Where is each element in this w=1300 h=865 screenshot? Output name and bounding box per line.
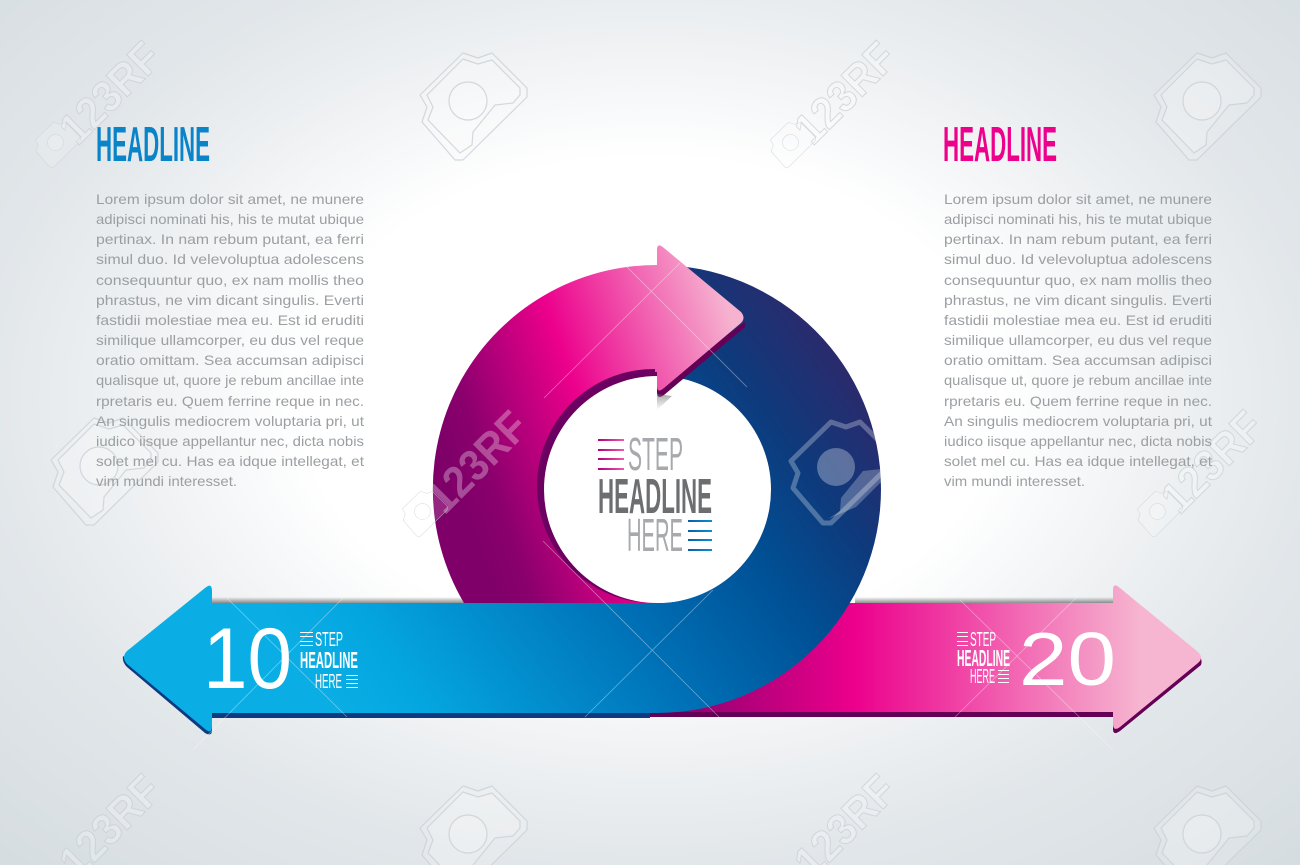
text block: right lorem ipsum: consequuntur quo, ex nam mollis theo <box>944 272 1212 288</box>
arrow: pink ring body <box>433 265 657 603</box>
watermark: stamp middle left <box>51 418 158 525</box>
text block: right lorem ipsum: rpretaris eu. Quem ferrine reque in nec. <box>944 393 1212 409</box>
text block: left lorem ipsum: oratio omittam. Sea accumsan adipisci <box>96 352 364 368</box>
text block: right lorem ipsum: solet mel cu. Has ea idque intellegat, et <box>944 453 1212 469</box>
text block: right lorem ipsum: qualisque ut, quore je rebum ancillae inte <box>944 372 1212 388</box>
small step label left: STEP <box>315 629 343 651</box>
number 10: 10 <box>203 611 292 707</box>
label: left number 10 <box>203 611 358 707</box>
watermark: stamp top right <box>1154 53 1261 160</box>
text block: left lorem ipsum: consequuntur quo, ex nam mollis theo <box>96 272 364 288</box>
text block: left lorem ipsum: phrastus, ne vim dicant singulis. Everti <box>96 292 364 308</box>
small step label right <box>957 629 1010 688</box>
text block: right lorem ipsum: fastidii molestiae mea eu. Est id eruditi <box>944 312 1212 328</box>
text block: left lorem ipsum: adipisci nominati his, his te mutat ubique <box>96 211 364 227</box>
text block: left lorem ipsum: Lorem ipsum dolor sit amet, ne munere <box>96 191 364 207</box>
text block: right lorem ipsum: similique ullamcorper, eu dus vel reque <box>944 332 1212 348</box>
watermark: stamp bottom centre <box>420 786 527 865</box>
text block: left lorem ipsum: solet mel cu. Has ea idque intellegat, et <box>96 453 364 469</box>
icon: blue lines <box>688 520 712 551</box>
text block: left lorem ipsum: fastidii molestiae mea eu. Est id eruditi <box>96 312 364 328</box>
label: right number 20 <box>957 617 1116 701</box>
small step label right: HERE <box>970 666 995 688</box>
text block: right lorem ipsum: vim mundi interesset. <box>944 473 1085 489</box>
icon: pink lines <box>598 439 624 470</box>
text block: left lorem ipsum: qualisque ut, quore je rebum ancillae inte <box>96 372 364 388</box>
panel: right text: HEADLINE <box>943 118 1057 172</box>
panel: left text <box>96 118 364 489</box>
number 20: 20 <box>1019 617 1116 701</box>
watermark: 123RF top centre right: 123RF <box>785 33 906 154</box>
text block: right lorem ipsum: iudico iisque appellantur nec, dicta nobis <box>944 433 1212 449</box>
inner dark edge of pink ring <box>537 369 657 603</box>
watermark: 123RF middle right: 123RF <box>1152 402 1273 523</box>
text block: right lorem ipsum: Lorem ipsum dolor sit amet, ne munere <box>944 191 1212 207</box>
text block: right lorem ipsum: simul duo. Id velevoluptua adolescens <box>944 251 1212 267</box>
panel: left text: HEADLINE <box>96 118 210 172</box>
text block: right lorem ipsum: phrastus, ne vim dicant singulis. Everti <box>944 292 1212 308</box>
watermark: stamp top centre <box>420 53 527 160</box>
watermark: stamp over ring <box>791 422 892 523</box>
small step label left <box>300 629 358 693</box>
text block: right lorem ipsum: An singulis mediocrem voluptaria pri, ut <box>944 413 1212 429</box>
text block: left lorem ipsum: simul duo. Id velevoluptua adolescens <box>96 251 364 267</box>
centre label: step headline here <box>598 428 712 561</box>
text block: right lorem ipsum: adipisci nominati his, his te mutat ubique <box>944 211 1212 227</box>
text: HEADLINE <box>300 647 358 673</box>
text block: left lorem ipsum <box>96 191 364 489</box>
text block: left lorem ipsum: iudico iisque appellantur nec, dicta nobis <box>96 433 364 449</box>
text block: left lorem ipsum: An singulis mediocrem voluptaria pri, ut <box>96 413 364 429</box>
watermark: 123RF top left: 123RF <box>50 33 171 154</box>
arrow: blue band with navy ring <box>123 265 881 734</box>
label: right number 20: HEADLINE <box>957 645 1010 671</box>
centre label: step headline here: HERE <box>627 509 683 561</box>
centre white circle <box>544 376 771 603</box>
arrow: right pink band <box>640 585 1202 733</box>
text block: left lorem ipsum: pertinax. In nam rebum putant, ea ferri <box>96 231 364 247</box>
arrowhead of pink ring <box>655 245 745 410</box>
watermark: 123RF over ring: 123RF <box>417 402 538 523</box>
text block: left lorem ipsum: rpretaris eu. Quem ferrine reque in nec. <box>96 393 364 409</box>
text block: right lorem ipsum: pertinax. In nam rebum putant, ea ferri <box>944 231 1212 247</box>
watermark: stamp bottom right <box>1154 786 1261 865</box>
text block: right lorem ipsum <box>944 191 1212 489</box>
panel: right text <box>943 118 1212 489</box>
text block: left lorem ipsum: vim mundi interesset. <box>96 473 237 489</box>
text: HEADLINE <box>598 470 712 524</box>
small step label left: HERE <box>315 671 342 693</box>
centre label: step headline here: STEP <box>628 428 683 480</box>
small step label right: STEP <box>970 629 996 651</box>
text block: right lorem ipsum: oratio omittam. Sea accumsan adipisci <box>944 352 1212 368</box>
text block: left lorem ipsum: similique ullamcorper, eu dus vel reque <box>96 332 364 348</box>
